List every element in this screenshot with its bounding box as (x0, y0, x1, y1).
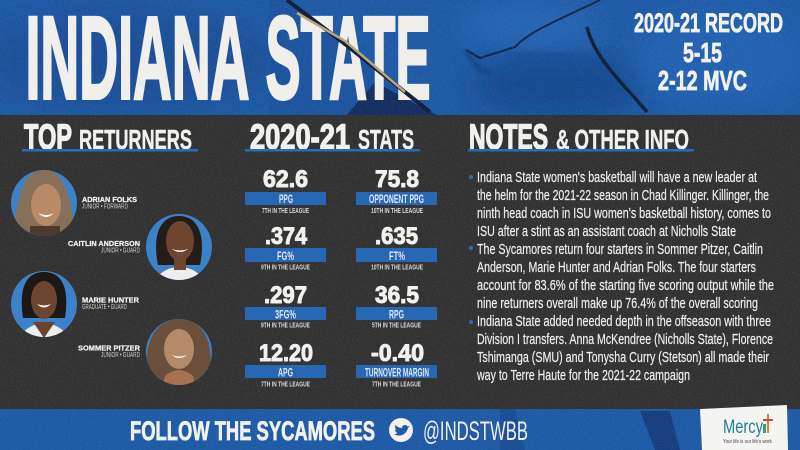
heading: stats: STATS (358, 124, 414, 155)
stat: turnover margin (356, 340, 437, 388)
panel: notes text: way to Terre Haute for the 2021-22 campaign (476, 367, 690, 384)
stat: opponent PPG: OPPONENT PPG (369, 192, 424, 206)
sponsor card: Mercy (700, 405, 788, 450)
stat: APG: 7TH IN THE LEAGUE (261, 380, 310, 388)
stat: RPG: RPG (389, 308, 404, 322)
heading: stats: 2020-21 (250, 118, 350, 157)
stat: APG: 12.20 (259, 340, 313, 367)
heading: notes (468, 118, 694, 157)
stat: FT%: .635 (375, 223, 418, 250)
stat: FT% (356, 223, 437, 272)
record block: 2-12 MVC (658, 65, 747, 96)
player: Adrian Folks: ADRIAN FOLKS (82, 195, 137, 204)
stat: PPG: PPG (279, 192, 293, 206)
torn paper fold across title (287, 0, 430, 112)
player: Adrian Folks (11, 170, 137, 238)
stat: FG%: FG% (277, 249, 294, 263)
stat: opponent PPG: 75.8 (375, 166, 419, 193)
stat: PPG (245, 166, 326, 215)
stat: FG%: .374 (265, 223, 308, 250)
stat: FG% (245, 223, 326, 272)
sponsor card: Mercy: Your life is our life's work. (723, 439, 773, 445)
stat: 3FG% (245, 282, 326, 330)
stat: FT%: FT% (389, 249, 405, 263)
player: Caitlin Anderson (68, 214, 212, 285)
player: Marie Hunter: MARIE HUNTER (82, 296, 140, 304)
stat: turnover margin: 7TH IN THE LEAGUE (372, 380, 421, 388)
player: Marie Hunter: GRADUATE • GUARD (82, 304, 127, 311)
record block (634, 8, 783, 96)
stat: RPG: 5TH IN THE LEAGUE (372, 320, 421, 330)
stat: turnover margin: -0.40 (371, 340, 424, 367)
bottom blue band (0, 409, 800, 450)
stat: turnover margin: TURNOVER MARGIN (365, 366, 429, 380)
stat: opponent PPG: 10TH IN THE LEAGUE (371, 206, 423, 215)
stat: 3FG%: .297 (264, 282, 307, 309)
icon: twitter bird (389, 418, 413, 442)
heading: notes: & OTHER INFO (556, 124, 689, 155)
player: Caitlin Anderson: CAITLIN ANDERSON (68, 239, 140, 248)
player: Marie Hunter (11, 271, 140, 340)
panel: top returners (11, 170, 212, 388)
player: Sommer Pitzer: SOMMER PITZER (78, 344, 141, 352)
top blue torn paper background (0, 0, 800, 120)
stat: FG%: 9TH IN THE LEAGUE (261, 262, 310, 272)
heading: top returners (22, 118, 198, 157)
stat: RPG (356, 282, 437, 330)
stat: APG: APG (278, 366, 293, 380)
footer: follow the sycamores: FOLLOW THE SYCAMORES (130, 416, 375, 446)
stat: 3FG%: 3FG% (275, 308, 296, 322)
heading: top returners: RETURNERS (79, 124, 192, 155)
dark textured centre panel (0, 115, 800, 410)
stat: APG (245, 340, 326, 388)
heading: notes: NOTES (469, 118, 548, 157)
player: Adrian Folks: JUNIOR • FORWARD (82, 204, 128, 210)
sponsor card: Mercy: Mercy (723, 417, 763, 438)
record block: 5-15 (683, 37, 722, 68)
stat: PPG: 62.6 (263, 166, 308, 193)
panel: stats (245, 166, 437, 388)
player: Caitlin Anderson: JUNIOR • GUARD (101, 248, 140, 254)
stat: RPG: 36.5 (375, 282, 419, 309)
footer: twitter handle: @INDSTWBB (423, 416, 528, 446)
player: Sommer Pitzer (78, 319, 212, 388)
panel: notes text (469, 169, 774, 384)
stat: opponent PPG (356, 166, 437, 215)
stat: 3FG%: 9TH IN THE LEAGUE (261, 320, 310, 330)
stat: PPG: 7TH IN THE LEAGUE (262, 206, 309, 215)
player: Sommer Pitzer: JUNIOR • GUARD (101, 352, 140, 359)
stat: FT%: 10TH IN THE LEAGUE (371, 262, 423, 272)
heading: top returners: TOP (24, 118, 72, 157)
